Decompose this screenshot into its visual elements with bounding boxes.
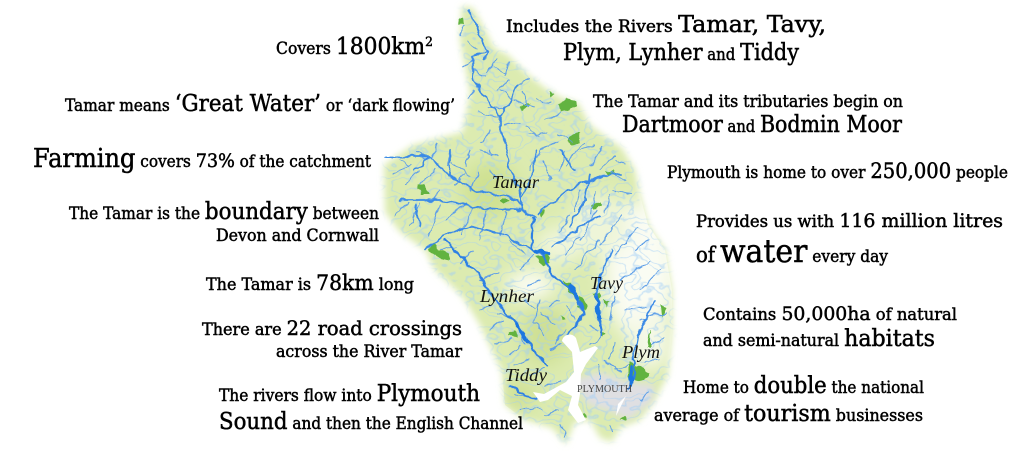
river network xyxy=(387,10,666,437)
facts: right column xyxy=(506,12,1008,427)
fact: habitats: and semi-natural habitats xyxy=(703,326,935,352)
fact: length: The Tamar is 78km long xyxy=(206,271,414,295)
fact: boundary: The Tamar is the boundary between xyxy=(69,199,379,225)
fact: rivers: Includes the Rivers Tamar, Tavy, xyxy=(506,12,826,38)
fact: flow to sea xyxy=(219,381,523,435)
river labels: PLYMOUTH xyxy=(577,384,632,395)
fact: farming: Farming covers 73% of the catchment xyxy=(33,144,371,174)
fact: tourism: Home to double the national xyxy=(683,373,924,399)
fact: road crossings: There are 22 road crossings xyxy=(202,316,462,340)
river labels: Plym xyxy=(621,342,660,362)
map: Tamar catchment xyxy=(375,0,680,450)
facts: left column xyxy=(33,34,523,435)
woodland patches xyxy=(418,18,666,420)
fact: sources xyxy=(593,92,903,138)
main rivers xyxy=(387,10,655,359)
fine stream texture xyxy=(375,0,680,450)
river labels: Tavy xyxy=(590,273,623,293)
fact: boundary: Devon and Cornwall xyxy=(216,226,379,245)
pale land tones xyxy=(462,162,676,411)
fact: water supply: Provides us with 116 million litres xyxy=(696,210,1003,232)
river labels: Lynher xyxy=(479,286,535,306)
fact: population: Plymouth is home to over 250,000 people xyxy=(667,159,1008,183)
catchment land shape xyxy=(384,6,672,444)
fact: tourism xyxy=(654,373,924,427)
fact: water supply: of water every day xyxy=(696,232,889,270)
fact: area: 2 xyxy=(425,35,433,50)
fact: sources: Dartmoor and Bodmin Moor xyxy=(622,112,902,138)
fact: water supply xyxy=(696,210,1003,270)
river labels: Tiddy xyxy=(505,365,547,385)
fact: boundary xyxy=(69,199,379,245)
estuary and Plymouth Sound xyxy=(533,334,626,423)
fact: flow to sea: The rivers flow into Plymouth xyxy=(219,381,480,407)
fact: rivers xyxy=(506,12,826,66)
tributaries xyxy=(393,25,630,214)
fact: sources: The Tamar and its tributaries begin on xyxy=(593,92,903,111)
fact: habitats xyxy=(703,303,957,352)
fact: flow to sea: Sound and then the English Channel xyxy=(219,409,523,435)
fact: name meaning: Tamar means ‘Great Water’ or ‘dark flowing’ xyxy=(65,91,455,117)
river labels xyxy=(479,172,660,395)
fact: habitats: Contains 50,000ha of natural xyxy=(703,303,957,325)
fact: tourism: average of tourism businesses xyxy=(654,401,923,427)
fact: road crossings: across the River Tamar xyxy=(276,342,462,361)
river labels: Tamar xyxy=(492,172,540,192)
urban area: Plymouth xyxy=(572,372,655,420)
fact: road crossings xyxy=(202,316,462,361)
fact: rivers: Plym, Lynher and Tiddy xyxy=(563,40,799,66)
fact: area: Covers 1800km xyxy=(276,34,430,60)
